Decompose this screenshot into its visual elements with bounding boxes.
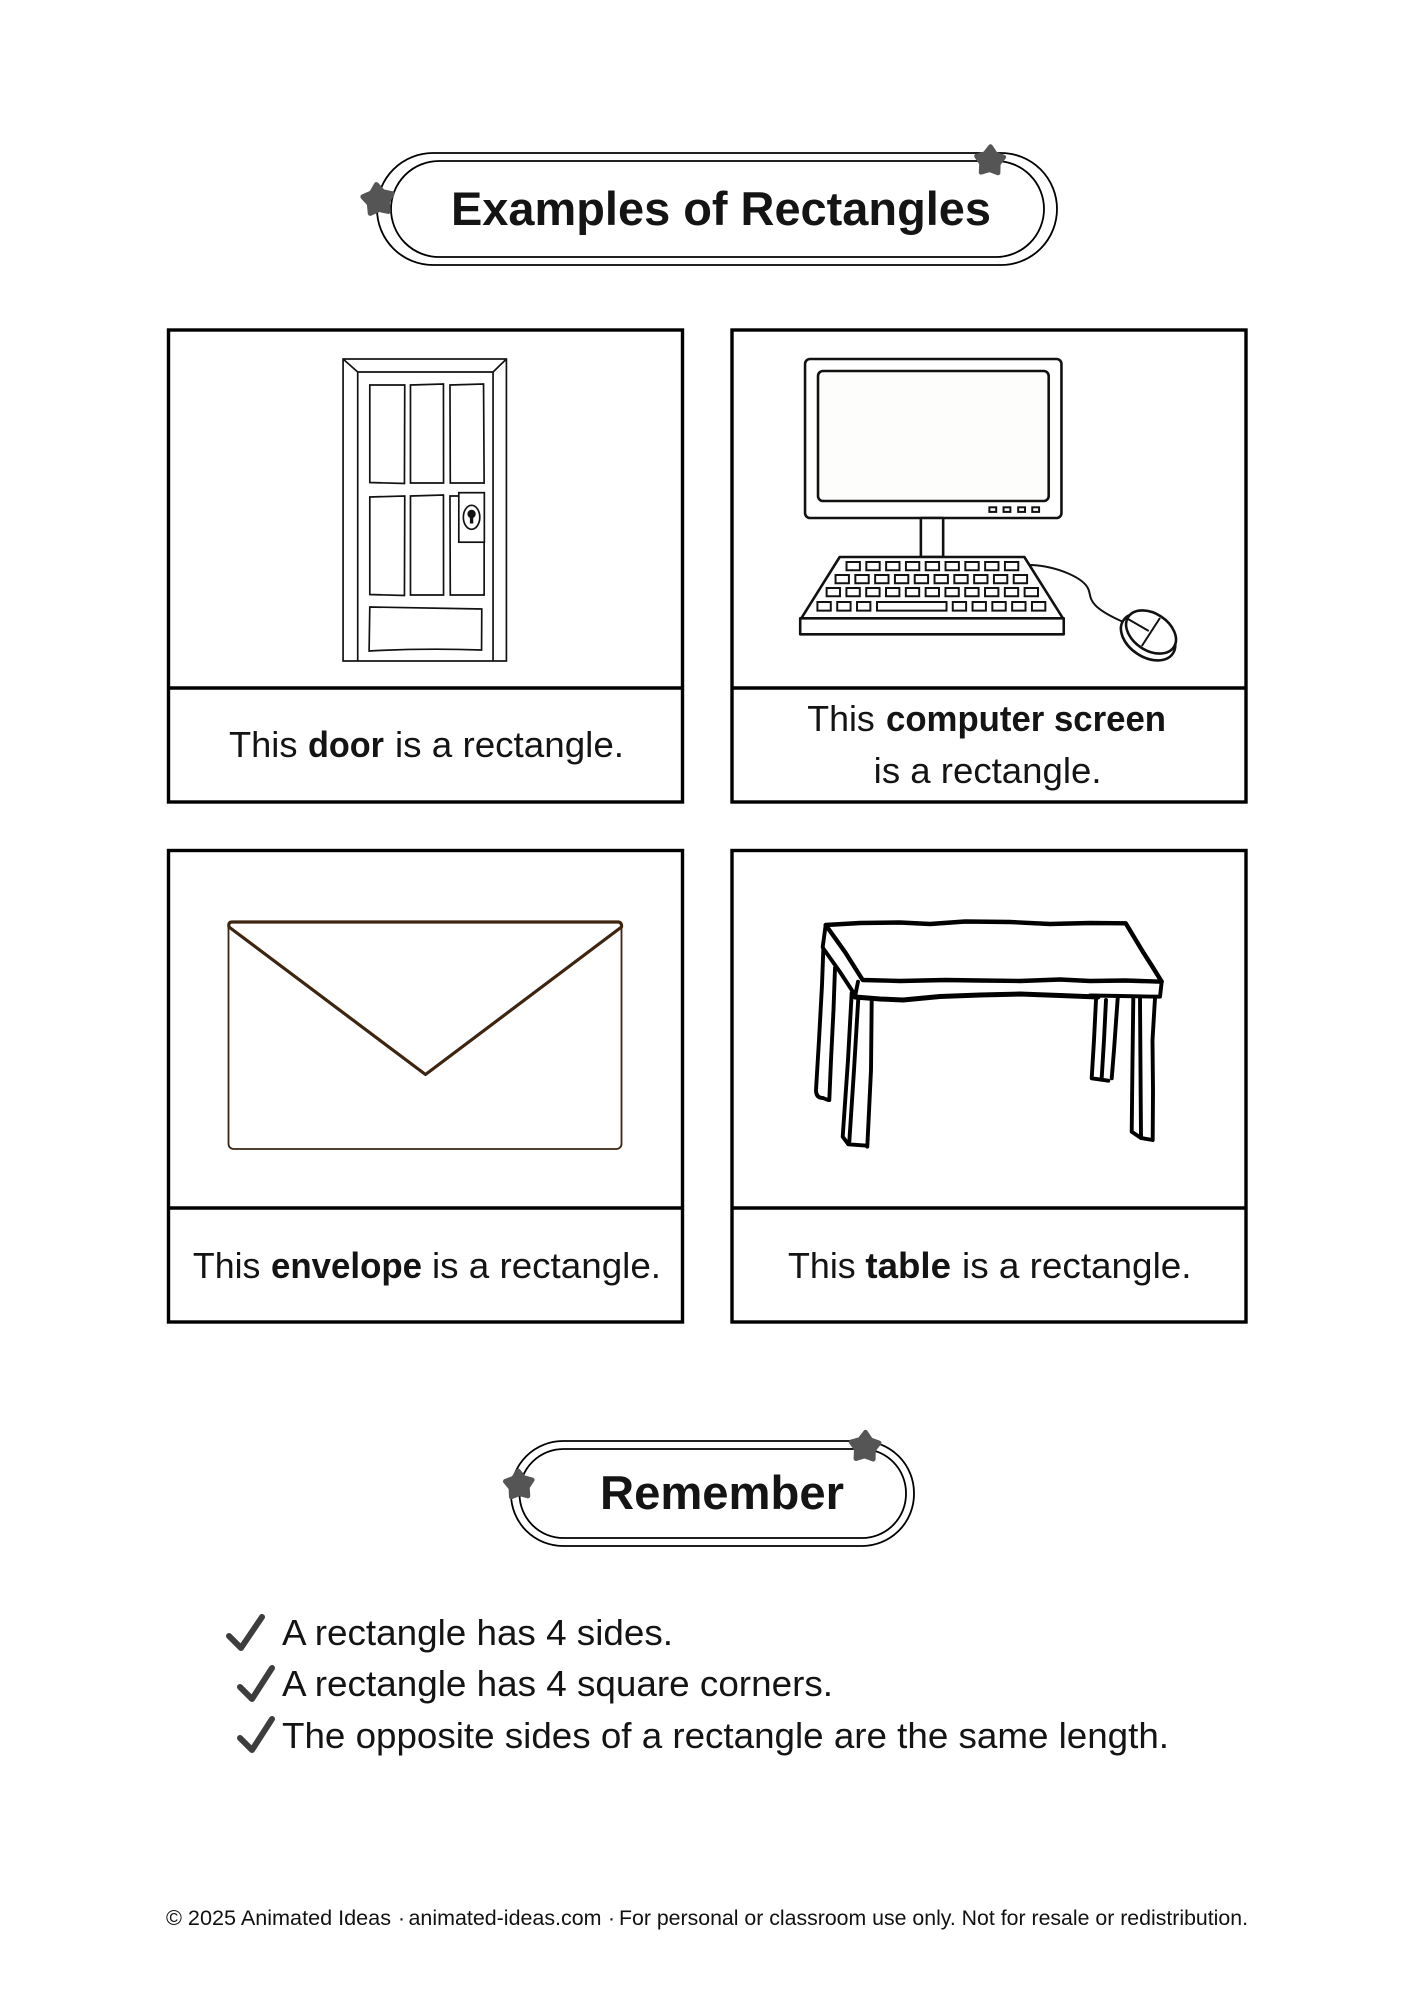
icon: keyhole	[463, 505, 480, 529]
icon: star right	[976, 146, 1004, 173]
footer note: ·	[398, 1907, 405, 1930]
checklist	[229, 1612, 1169, 1756]
caption: table: is a rectangle.	[962, 1245, 1192, 1286]
keyboard	[800, 557, 1064, 634]
caption: door: This	[229, 724, 298, 765]
caption: table: table	[865, 1245, 951, 1286]
footer note: For personal or classroom use only. Not for resale or redistribution.	[619, 1907, 1248, 1930]
caption line 2: is a rectangle.	[874, 750, 1102, 791]
footer note: animated-ideas.com	[408, 1907, 602, 1930]
panel: computer	[732, 330, 1246, 802]
item 2: A rectangle has 4 square corners.	[282, 1663, 833, 1704]
caption: door: is a rectangle.	[395, 724, 624, 765]
caption: envelope: envelope	[271, 1245, 422, 1286]
illustration: envelope	[228, 922, 622, 1149]
icon: check 1	[229, 1617, 262, 1648]
title banner	[362, 146, 1057, 265]
icon: star right	[851, 1432, 879, 1459]
table top	[826, 922, 1162, 982]
icon: check 2	[240, 1668, 272, 1699]
illustration: table	[816, 922, 1162, 1147]
footer note: ·	[608, 1907, 615, 1930]
caption: computer screen: computer screen	[886, 698, 1166, 739]
remember heading: Remember	[600, 1466, 844, 1519]
caption: table: This	[788, 1245, 856, 1286]
panel: door	[168, 330, 682, 802]
icon: star left	[362, 183, 394, 214]
caption: computer screen	[807, 698, 1166, 791]
footer note: © 2025 Animated Ideas	[166, 1907, 391, 1930]
mouse and cable	[1030, 565, 1184, 670]
caption: envelope: This	[193, 1245, 260, 1286]
panel: table	[732, 850, 1246, 1322]
caption: envelope: is a rectangle.	[432, 1245, 661, 1286]
monitor	[805, 359, 1061, 557]
item 1: A rectangle has 4 sides.	[282, 1612, 673, 1653]
remember banner	[505, 1432, 914, 1546]
table front and side edge	[823, 925, 1162, 997]
item 3: The opposite sides of a rectangle are the same length.	[282, 1715, 1169, 1756]
title text: Examples of Rectangles	[451, 182, 991, 235]
caption: door: door	[308, 724, 384, 765]
illustration: door	[343, 359, 506, 661]
illustration: computer	[800, 359, 1184, 670]
icon: check 3	[240, 1719, 272, 1750]
caption: computer screen: This	[807, 698, 875, 739]
icon: star left	[505, 1470, 533, 1497]
panel: envelope	[168, 850, 682, 1322]
table legs	[816, 950, 835, 1100]
